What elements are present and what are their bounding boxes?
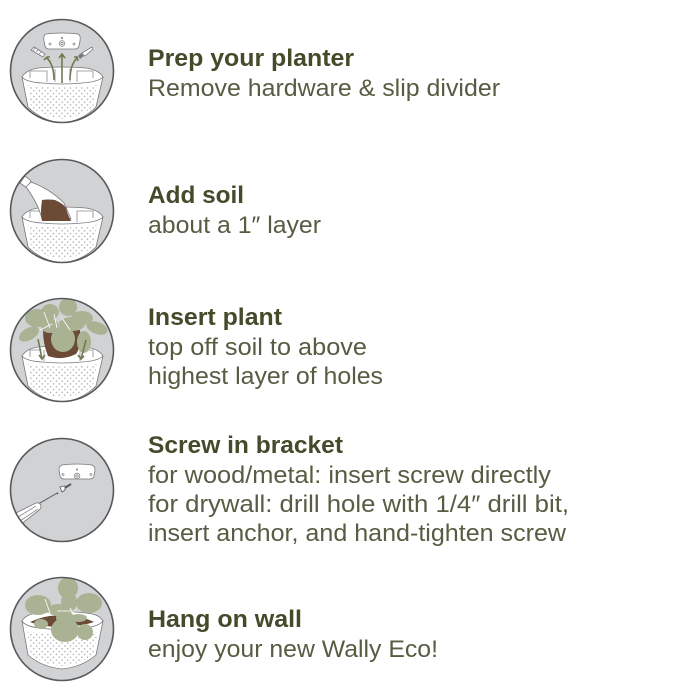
step 3 description: top off soil to above	[148, 334, 367, 361]
icon: trowel adding soil to planter	[10, 160, 114, 263]
step 5 heading: Hang on wall	[148, 606, 302, 633]
icon: planter with hardware removed	[10, 20, 114, 123]
step 3 heading: Insert plant	[148, 304, 282, 331]
step 3: insert plant	[10, 298, 383, 402]
icon: screwdriver and wall bracket	[10, 438, 114, 542]
step 1 heading: Prep your planter	[148, 45, 354, 72]
icon: finished planter with plant	[10, 577, 114, 680]
step 5 description: enjoy your new Wally Eco!	[148, 636, 438, 663]
step 4 description line 1: for wood/metal: insert screw directly	[148, 462, 551, 489]
step 2 description: about a 1″ layer	[148, 212, 321, 239]
icon: plant lowered into planter	[10, 298, 114, 402]
step 3 description line 2: highest layer of holes	[148, 363, 383, 390]
step 4 description line 2: for drywall: drill hole with 1/4″ drill bit,	[148, 491, 569, 518]
step 2: add soil	[10, 160, 321, 263]
step 4 description line 3: insert anchor, and hand-tighten screw	[148, 520, 567, 547]
step 4 heading: Screw in bracket	[148, 432, 343, 459]
step 1: prep your planter	[10, 20, 500, 123]
step 5: hang on wall	[10, 577, 438, 680]
step 2 heading: Add soil	[148, 182, 244, 209]
step 4: screw in bracket	[10, 432, 569, 547]
step 1 description: Remove hardware & slip divider	[148, 75, 500, 102]
